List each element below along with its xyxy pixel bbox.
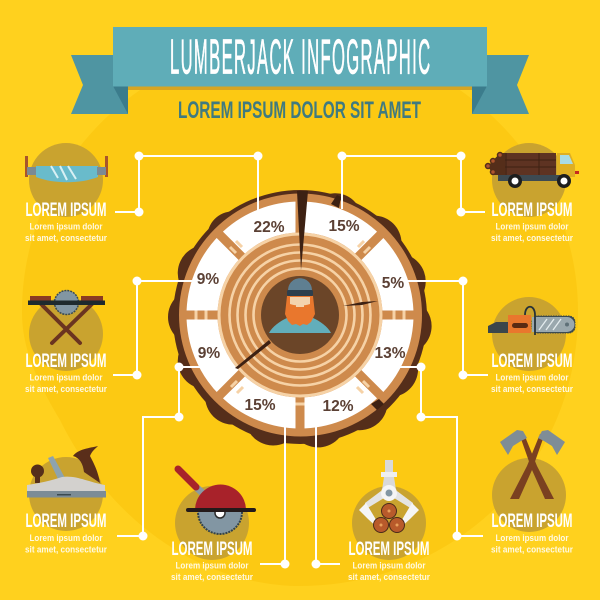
percentages: 22% bbox=[253, 219, 285, 236]
lumberjack bbox=[269, 278, 331, 333]
item: circular saw: sit amet, consectetur bbox=[171, 572, 253, 582]
percentages: 12% bbox=[322, 398, 354, 415]
tree log chart bbox=[168, 186, 434, 452]
item: log grapple bbox=[348, 460, 430, 582]
item: two-man saw: sit amet, consectetur bbox=[25, 233, 107, 243]
item: hand plane bbox=[25, 446, 107, 554]
white segments bbox=[202, 217, 398, 413]
item: table saw bbox=[25, 290, 107, 394]
item: two-man saw: LOREM IPSUM bbox=[26, 199, 106, 221]
item: chainsaw: sit amet, consectetur bbox=[491, 384, 573, 394]
item: table saw: Lorem ipsum dolor bbox=[30, 372, 103, 382]
item: chainsaw: Lorem ipsum dolor bbox=[496, 372, 569, 382]
item: two-man saw: Lorem ipsum dolor bbox=[30, 222, 103, 232]
item: crossed axes: Lorem ipsum dolor bbox=[496, 533, 569, 543]
item: log grapple: LOREM IPSUM bbox=[348, 538, 430, 560]
tree rings bbox=[218, 232, 382, 398]
item: two-man saw bbox=[25, 143, 108, 243]
item: circular saw bbox=[171, 469, 256, 582]
item: log grapple: Lorem ipsum dolor bbox=[352, 560, 426, 570]
percentages: 9% bbox=[198, 345, 220, 362]
tan ring bbox=[179, 194, 422, 436]
connector lines bbox=[113, 152, 488, 568]
percentages bbox=[197, 218, 406, 415]
percentages: 13% bbox=[374, 345, 406, 362]
item: circular saw: Lorem ipsum dolor bbox=[176, 560, 249, 570]
cracks bbox=[235, 191, 384, 410]
banner bbox=[71, 27, 529, 114]
item: hand plane: LOREM IPSUM bbox=[26, 510, 106, 532]
item: table saw: sit amet, consectetur bbox=[25, 384, 107, 394]
item: hand plane: Lorem ipsum dolor bbox=[30, 533, 103, 543]
center disc bbox=[261, 276, 339, 354]
percentages: 5% bbox=[382, 275, 404, 292]
item: logging truck bbox=[486, 143, 579, 243]
item: crossed axes: sit amet, consectetur bbox=[491, 544, 573, 554]
item: circular saw: LOREM IPSUM bbox=[172, 538, 252, 560]
item: hand plane: sit amet, consectetur bbox=[25, 544, 107, 554]
item: chainsaw bbox=[488, 297, 575, 394]
percentages: 15% bbox=[244, 397, 276, 414]
item: crossed axes bbox=[491, 430, 573, 554]
percentages: 15% bbox=[328, 218, 360, 235]
title: LUMBERJACK INFOGRAPHIC bbox=[170, 29, 430, 84]
subtitle: LOREM IPSUM DOLOR SIT AMET bbox=[178, 97, 421, 124]
percentages: 9% bbox=[197, 271, 219, 288]
item: log grapple: sit amet, consectetur bbox=[348, 572, 430, 582]
bark bbox=[168, 186, 434, 452]
item: logging truck: sit amet, consectetur bbox=[491, 233, 573, 243]
segment dividers bbox=[185, 200, 415, 430]
item: logging truck: Lorem ipsum dolor bbox=[496, 222, 569, 232]
item: table saw: LOREM IPSUM bbox=[26, 350, 106, 372]
